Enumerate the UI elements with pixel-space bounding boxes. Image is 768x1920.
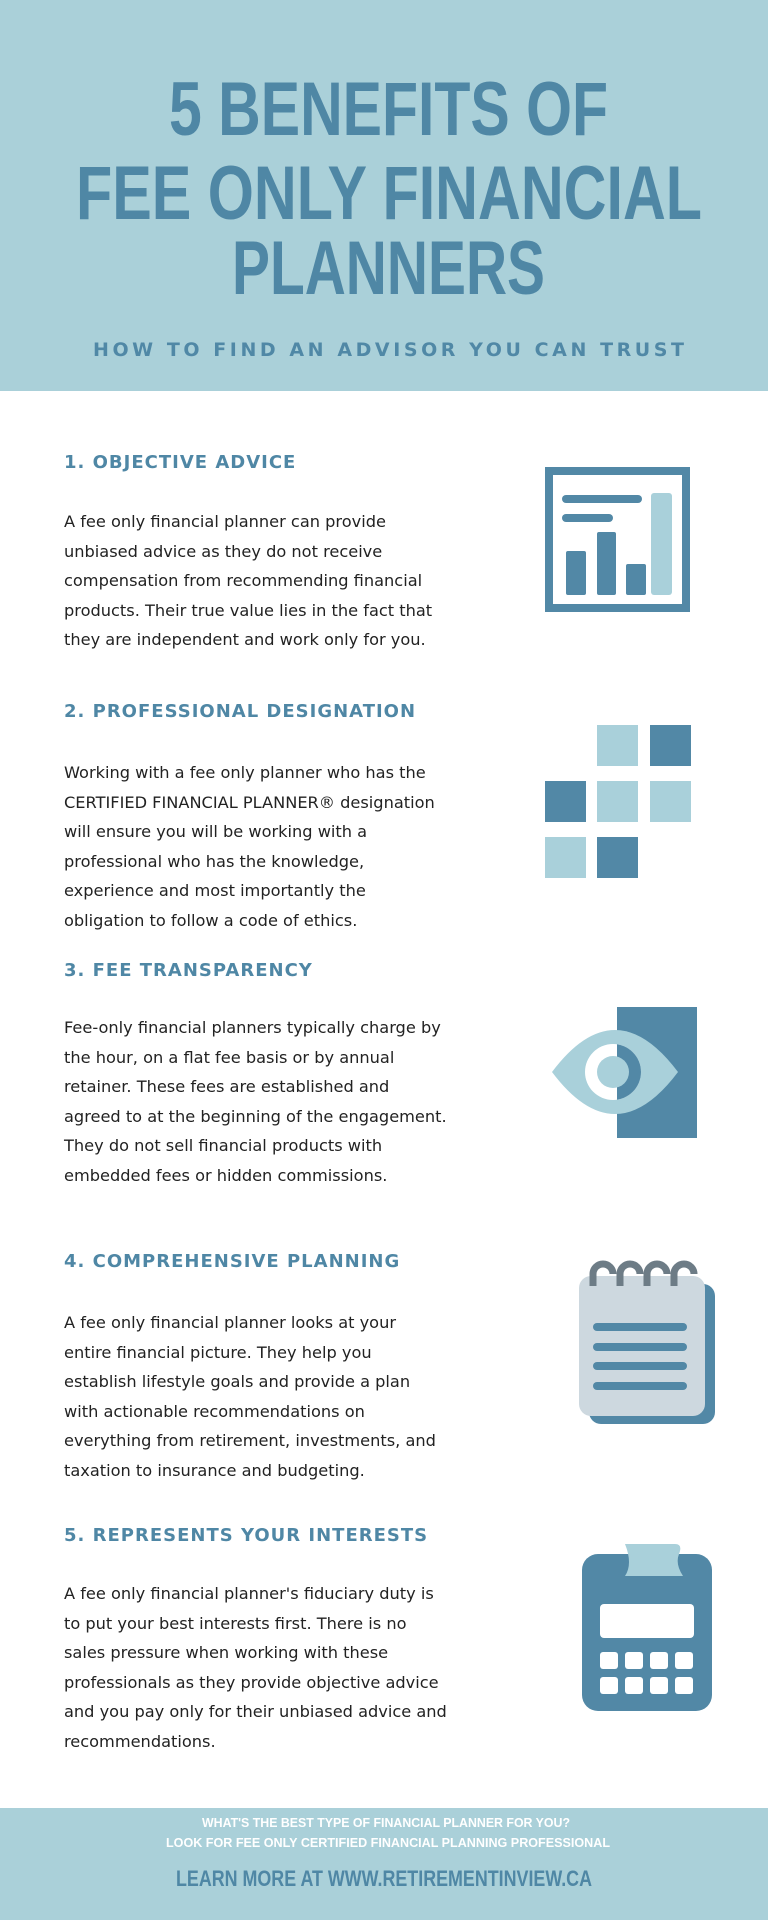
heading 4: 4. COMPREHENSIVE PLANNING <box>64 1251 400 1272</box>
text 2: obligation to follow a code of ethics. <box>64 910 357 930</box>
text 1: compensation from recommending financial <box>64 571 422 590</box>
title: HOW TO FIND AN ADVISOR YOU CAN TRUST <box>93 339 684 361</box>
text 5 <box>64 1584 447 1750</box>
text 3: embedded fees or hidden commissions. <box>64 1166 387 1184</box>
text 5: and you pay only for their unbiased advice and <box>64 1702 447 1721</box>
text 3: They do not sell financial products with <box>64 1136 382 1155</box>
text 4: with actionable recommendations on <box>64 1402 365 1420</box>
text 5: A fee only financial planner's fiduciary duty is <box>64 1584 434 1603</box>
title: PLANNERS <box>232 226 545 311</box>
heading 1: 1. OBJECTIVE ADVICE <box>64 452 296 473</box>
text 1: unbiased advice as they do not receive <box>64 542 382 560</box>
text 4: entire financial picture. They help you <box>64 1342 372 1362</box>
heading 5: 5. REPRESENTS YOUR INTERESTS <box>64 1525 428 1546</box>
text 3: Fee-only financial planners typically charge by <box>64 1018 441 1037</box>
text 1: products. Their true value lies in the fact that <box>64 600 432 620</box>
text 4 <box>64 1313 436 1480</box>
text 2: will ensure you will be working with a <box>64 822 367 841</box>
icon: report chart <box>545 467 690 612</box>
text 5: sales pressure when working with these <box>64 1643 388 1662</box>
text 5: professionals as they provide objective advice <box>64 1672 439 1692</box>
title <box>76 67 702 361</box>
text 5: recommendations. <box>64 1732 216 1750</box>
text 4: establish lifestyle goals and provide a plan <box>64 1372 410 1391</box>
text 3: agreed to at the beginning of the engagement. <box>64 1106 447 1126</box>
text 3 <box>64 1018 447 1184</box>
footer text: LEARN MORE AT WWW.RETIREMENTINVIEW.CA <box>176 1866 592 1891</box>
icon: squares <box>545 725 691 878</box>
heading 3: 3. FEE TRANSPARENCY <box>64 960 313 981</box>
icon: eye <box>552 1007 697 1138</box>
footer text: WHAT'S THE BEST TYPE OF FINANCIAL PLANNER FOR YOU? <box>202 1815 570 1830</box>
text 4: A fee only financial planner looks at your <box>64 1313 396 1332</box>
text 2: CERTIFIED FINANCIAL PLANNER® designation <box>64 792 435 812</box>
header banner <box>0 0 768 391</box>
text 1 <box>64 512 432 649</box>
text 5: to put your best interests first. There is no <box>64 1614 406 1632</box>
text 2: professional who has the knowledge, <box>64 852 364 870</box>
text 2 <box>64 763 435 930</box>
icon: calculator <box>582 1544 712 1711</box>
text 1: A fee only financial planner can provide <box>64 512 386 531</box>
text 1: they are independent and work only for you. <box>64 630 426 649</box>
text 4: taxation to insurance and budgeting. <box>64 1460 365 1480</box>
text 3: retainer. These fees are established and <box>64 1077 389 1096</box>
heading 2: 2. PROFESSIONAL DESIGNATION <box>64 701 416 722</box>
text 3: the hour, on a flat fee basis or by annual <box>64 1048 394 1066</box>
text 4: everything from retirement, investments, and <box>64 1431 436 1450</box>
footer <box>0 1808 768 1920</box>
footer text <box>166 1815 610 1891</box>
text 2: experience and most importantly the <box>64 881 366 900</box>
text 2: Working with a fee only planner who has the <box>64 763 426 782</box>
icon: notepad <box>579 1260 715 1424</box>
title: 5 BENEFITS OF <box>169 67 608 152</box>
footer text: LOOK FOR FEE ONLY CERTIFIED FINANCIAL PLANNING PROFESSIONAL <box>166 1835 610 1850</box>
